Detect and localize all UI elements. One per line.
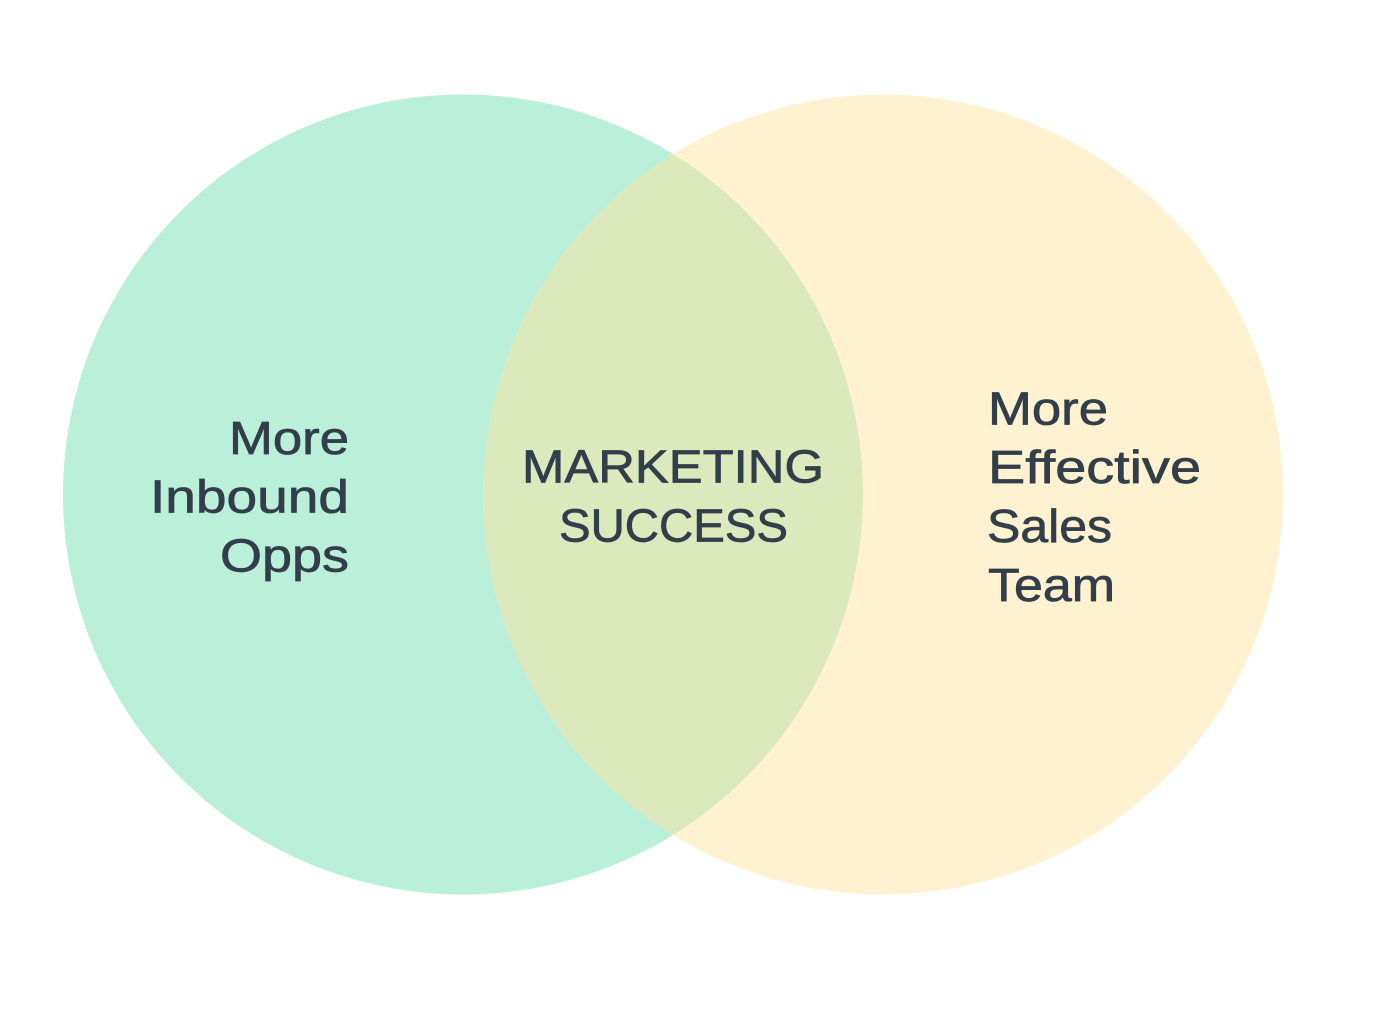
- label: more inbound opps: More: [229, 412, 349, 464]
- label: more effective sales team: More: [988, 382, 1108, 434]
- label: more effective sales team: Effective: [988, 441, 1201, 493]
- overlap region: [483, 154, 863, 835]
- circle: more effective sales team: [483, 94, 1283, 894]
- label: more inbound opps: [150, 412, 349, 582]
- label: more inbound opps: Inbound: [150, 470, 349, 522]
- label: more inbound opps: Opps: [220, 530, 349, 582]
- label: more effective sales team: Team: [988, 559, 1115, 611]
- venn diagram: [63, 94, 1283, 894]
- label: marketing success: MARKETING: [522, 440, 824, 492]
- label: more effective sales team: Sales: [987, 500, 1112, 552]
- label: marketing success: [522, 440, 824, 552]
- circle: more inbound opps: [63, 94, 863, 894]
- label: marketing success: SUCCESS: [559, 500, 788, 552]
- label: more effective sales team: [987, 382, 1201, 611]
